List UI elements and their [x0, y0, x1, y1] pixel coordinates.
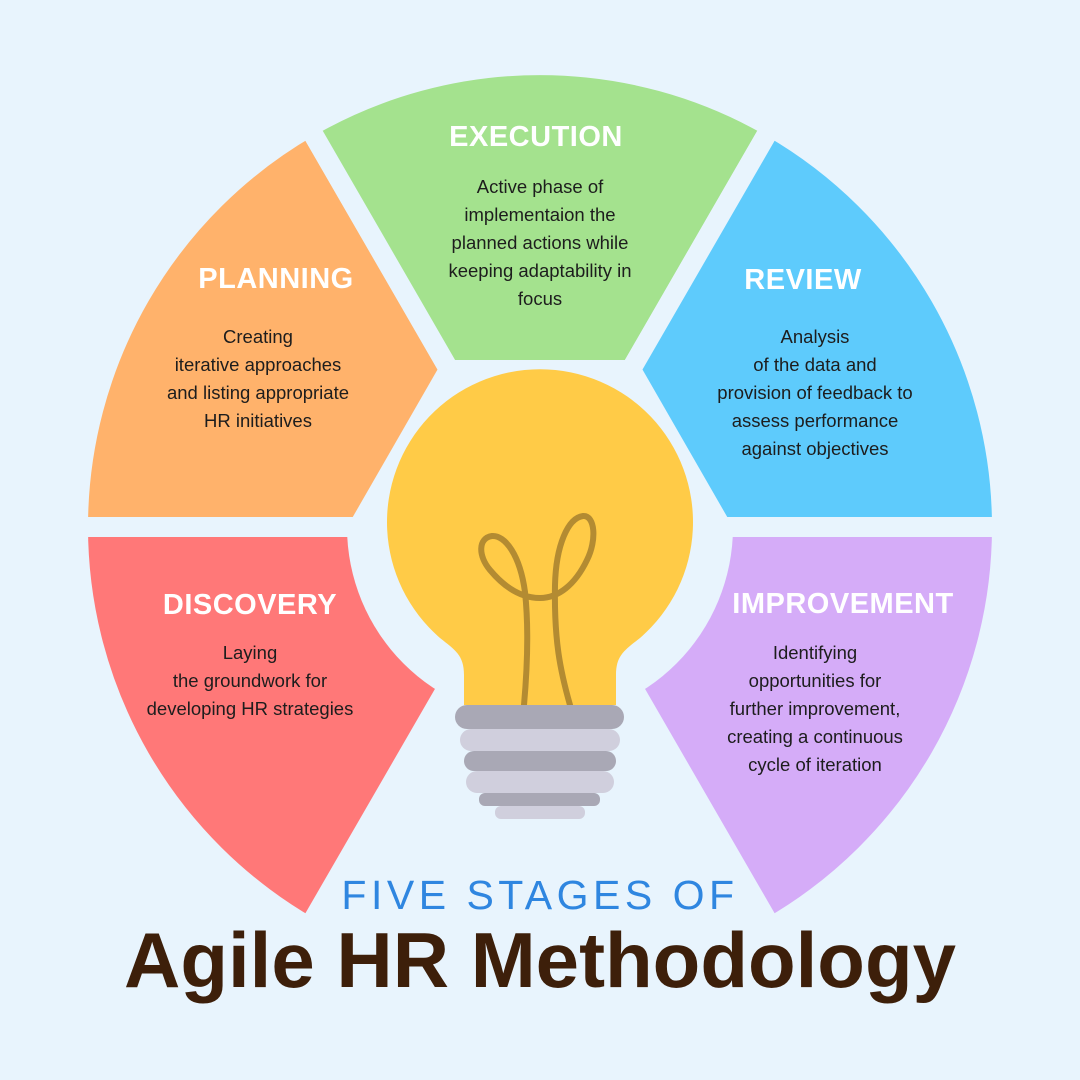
text: execution: focus	[518, 288, 562, 309]
text: improvement: Identifying	[773, 642, 857, 663]
text: execution: planned actions while	[452, 232, 628, 253]
text: improvement: cycle of iteration	[748, 754, 882, 775]
text: review	[717, 326, 913, 459]
heading: improvement: IMPROVEMENT	[732, 588, 954, 620]
text: execution: Active phase of	[477, 176, 603, 197]
icon: light bulb	[387, 369, 693, 819]
text: planning: iterative approaches	[175, 354, 341, 375]
title: five stages of: FIVE STAGES OF	[341, 872, 739, 918]
text: improvement: further improvement,	[730, 698, 900, 719]
heading: discovery: DISCOVERY	[163, 589, 337, 621]
text: improvement: creating a continuous	[727, 726, 903, 747]
text: discovery	[147, 642, 353, 719]
title: agile hr methodology: Agile HR Methodology	[124, 916, 956, 1004]
segment: planning	[78, 127, 540, 527]
text: planning: HR initiatives	[204, 410, 312, 431]
text: improvement	[727, 642, 903, 775]
text: execution	[448, 176, 632, 309]
text: planning: Creating	[223, 326, 293, 347]
text: planning: and listing appropriate	[167, 382, 349, 403]
text: discovery: developing HR strategies	[147, 698, 353, 719]
segment: execution	[309, 65, 771, 527]
text: review: assess performance	[732, 410, 898, 431]
segment: review	[540, 127, 1002, 527]
segment: improvement	[540, 527, 1002, 927]
text: improvement: opportunities for	[749, 670, 881, 691]
text: review: of the data and	[753, 354, 877, 375]
heading: planning: PLANNING	[198, 263, 354, 295]
segment: discovery	[78, 527, 540, 927]
text: discovery: the groundwork for	[173, 670, 327, 691]
text: review: Analysis	[781, 326, 849, 347]
text: execution: implementaion the	[464, 204, 616, 225]
text: discovery: Laying	[223, 642, 277, 663]
text: planning	[167, 326, 349, 431]
heading: review: REVIEW	[744, 264, 862, 296]
text: review: against objectives	[741, 438, 889, 459]
text: execution: keeping adaptability in	[448, 260, 632, 281]
heading: execution: EXECUTION	[449, 121, 623, 153]
text: review: provision of feedback to	[717, 382, 913, 403]
